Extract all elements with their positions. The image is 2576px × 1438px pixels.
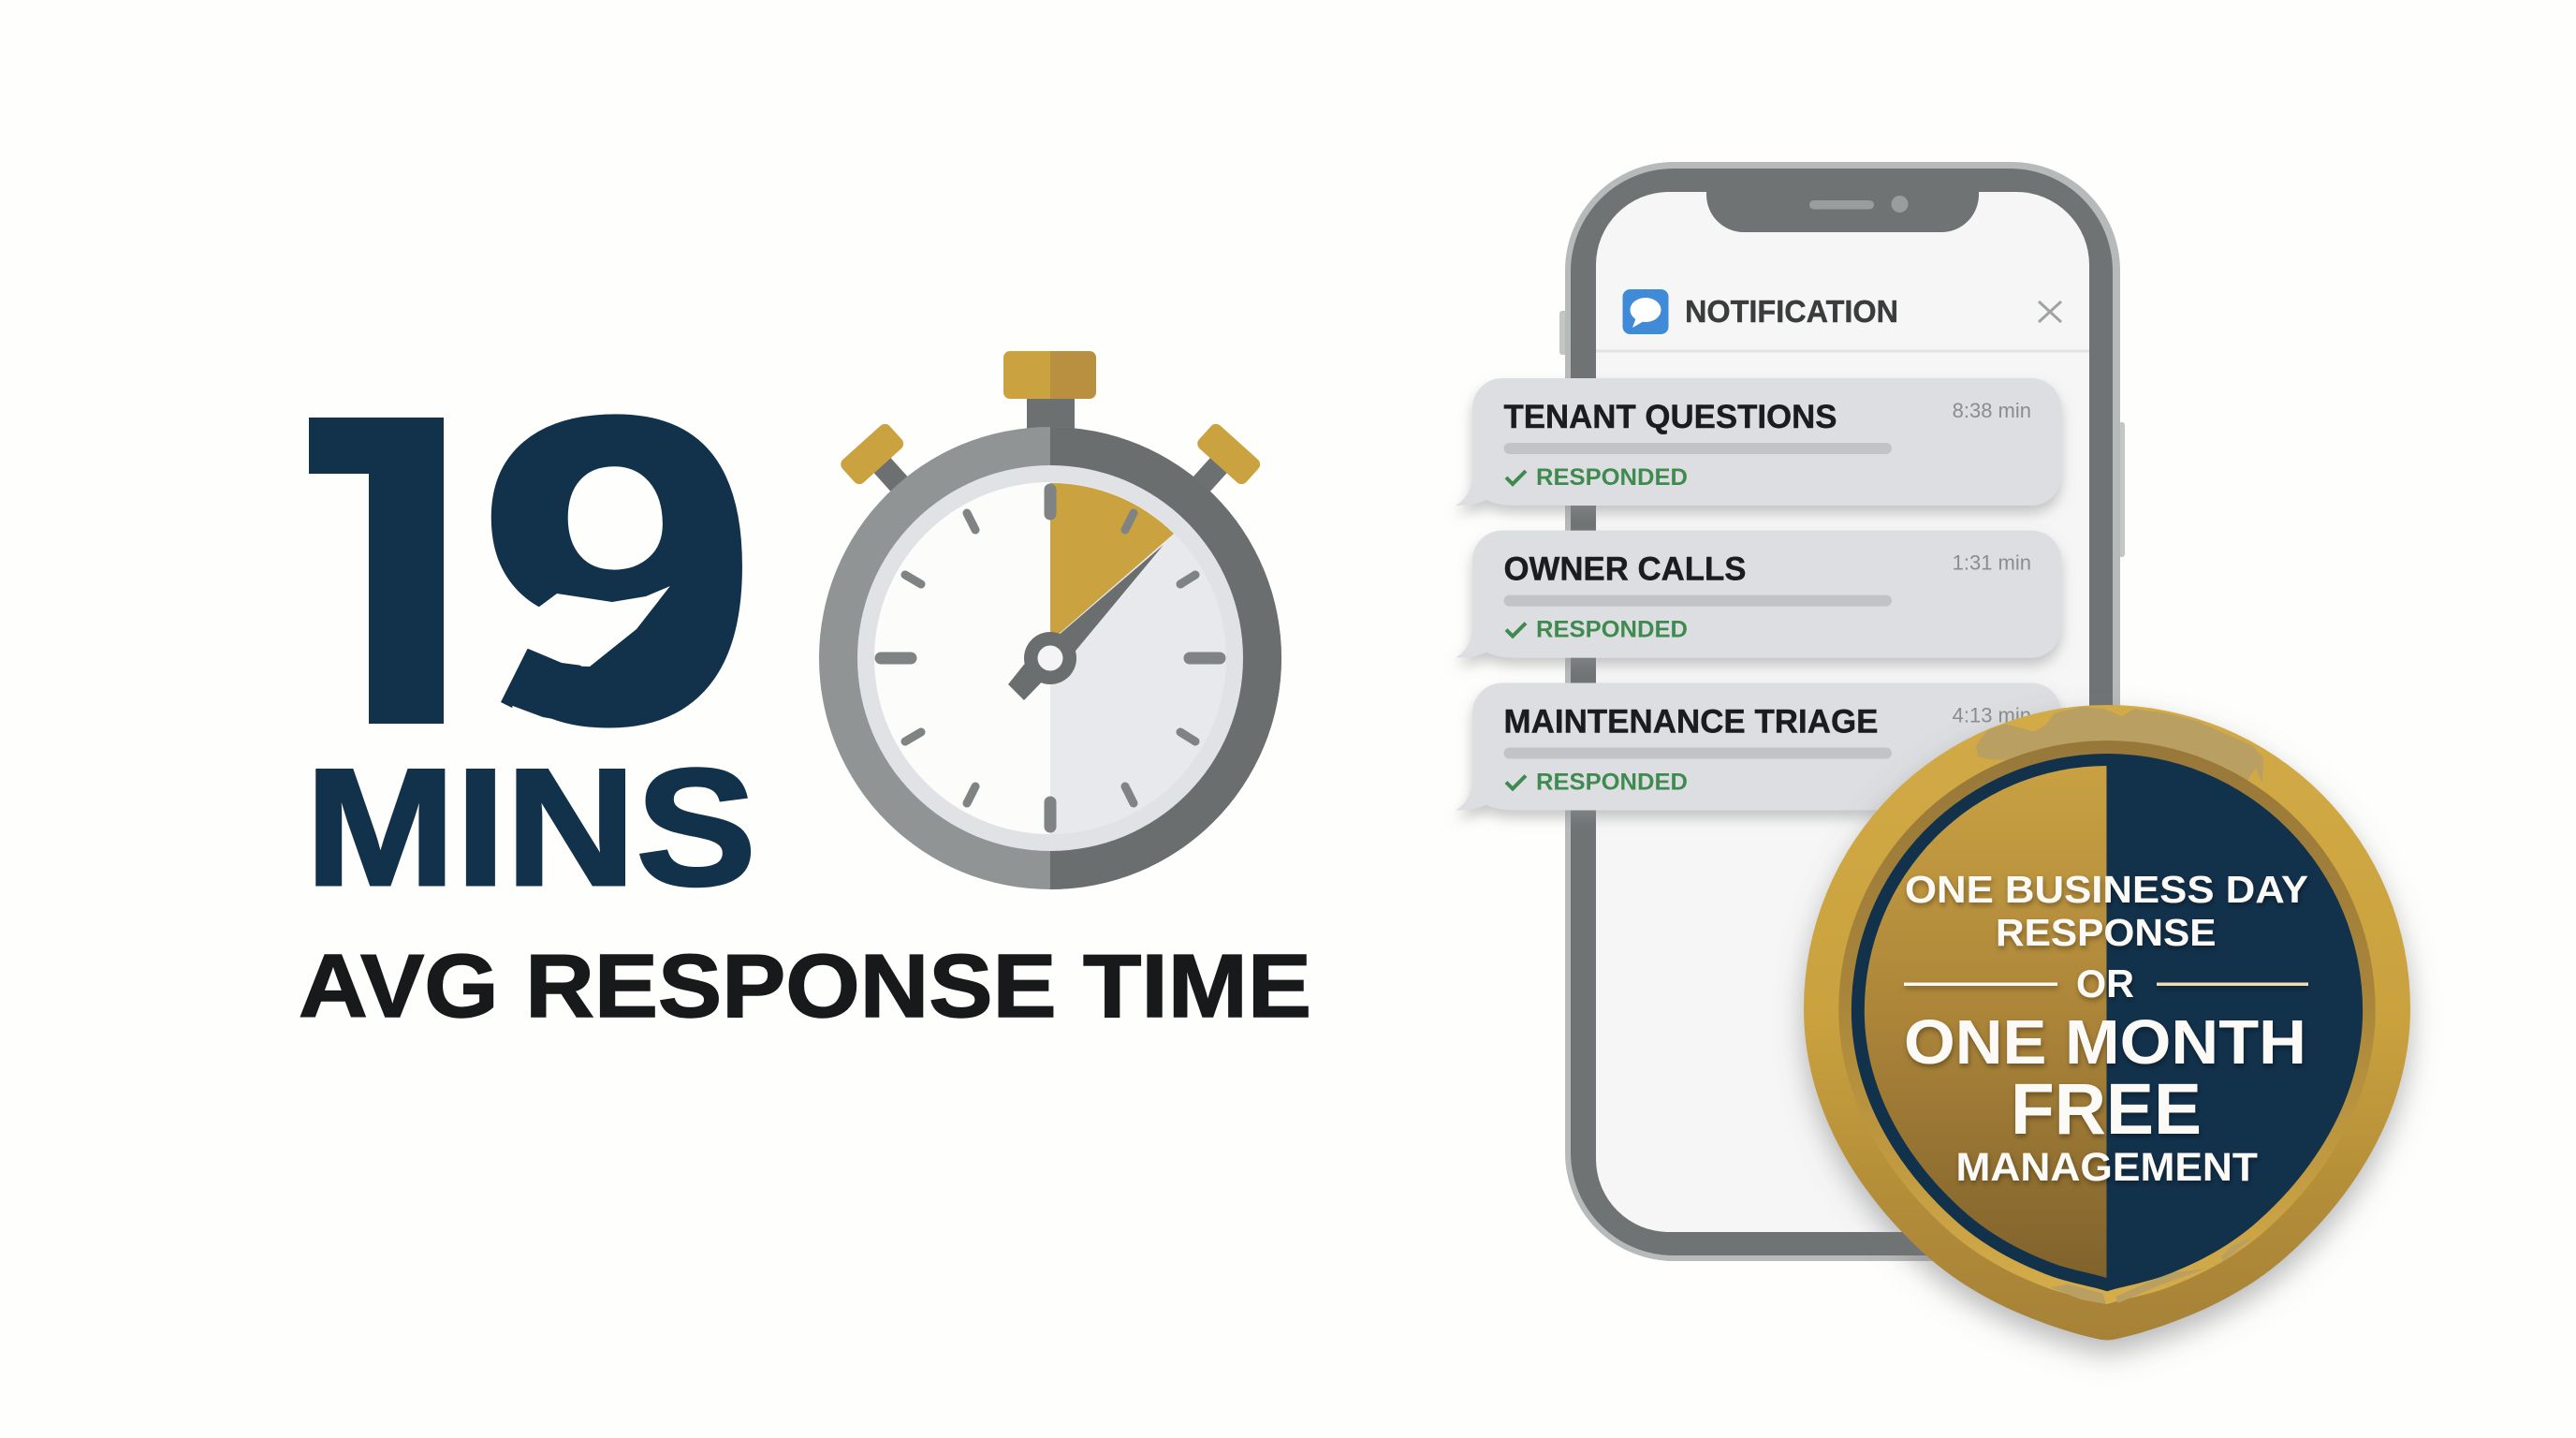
icon: close [2039, 301, 2061, 322]
badge text: ONE MONTH [1904, 1007, 2306, 1078]
guarantee badge [1804, 705, 2410, 1341]
tick marks [881, 490, 1220, 827]
side buttons [1559, 311, 2125, 557]
title: TENANT QUESTIONS [1503, 399, 1837, 435]
camera [1891, 196, 1908, 213]
speaker [1809, 200, 1874, 210]
check [1506, 624, 1526, 637]
heading: AVG RESPONSE TIME: AVG RESPONSE TIME [299, 936, 1311, 1036]
heading: MINS: MINS [305, 734, 756, 920]
big number: 19: 9 [477, 327, 758, 814]
badge text: RESPONSE [1996, 911, 2217, 954]
notification card: tenant questions [1456, 378, 2061, 506]
phone body [1565, 162, 2120, 1261]
card bubble [1456, 378, 2061, 506]
status: RESPONDED [1536, 464, 1688, 491]
badge text: ONE BUSINESS DAY [1905, 868, 2308, 911]
notification card: owner calls [1456, 531, 2061, 658]
check [1506, 775, 1526, 788]
time: 4:13 min [1953, 704, 2031, 726]
icon: message app [1623, 289, 1668, 334]
phone bezel [1571, 169, 2113, 1255]
badge outer gold [1804, 705, 2410, 1341]
check [1506, 471, 1526, 484]
badge text: FREE [2011, 1069, 2202, 1150]
bar [1503, 443, 1892, 454]
status: RESPONDED [1536, 770, 1688, 796]
big number: 19: 1 [276, 322, 522, 815]
stopwatch face [857, 465, 1243, 851]
badge gold half [1865, 766, 2106, 1278]
time: 8:38 min [1953, 399, 2031, 422]
icon: stopwatch [819, 351, 1281, 889]
big number: 19 [253, 322, 758, 815]
notch [1706, 187, 1979, 232]
notification card: maintenance triage [1456, 683, 2061, 811]
crown stem [1027, 393, 1075, 435]
badge text [1904, 868, 2308, 1190]
title: OWNER CALLS [1503, 551, 1747, 588]
bar [1503, 595, 1892, 607]
phone [1559, 162, 2125, 1261]
title: MAINTENANCE TRIAGE [1503, 704, 1878, 740]
badge navy field [1852, 754, 2363, 1291]
time: 1:31 min [1953, 551, 2031, 575]
left side button [838, 421, 934, 518]
stopwatch hand [1008, 545, 1164, 700]
card bubble [1456, 683, 2061, 811]
worn patch: top [1976, 707, 2263, 784]
crown cap [1003, 351, 1096, 399]
worn patches: bottom [2050, 1236, 2254, 1304]
stopwatch ring [819, 427, 1281, 889]
right side button [1167, 421, 1263, 518]
notification heading: NOTIFICATION [1685, 294, 1898, 329]
badge bevel [1838, 741, 2376, 1304]
badge text: MANAGEMENT [1956, 1145, 2258, 1190]
bar [1503, 747, 1892, 758]
phone screen [1596, 192, 2089, 1232]
status: RESPONDED [1536, 617, 1688, 643]
badge text: OR [2076, 961, 2134, 1005]
card bubble [1456, 531, 2061, 658]
gold elapsed wedge [1050, 483, 1174, 641]
